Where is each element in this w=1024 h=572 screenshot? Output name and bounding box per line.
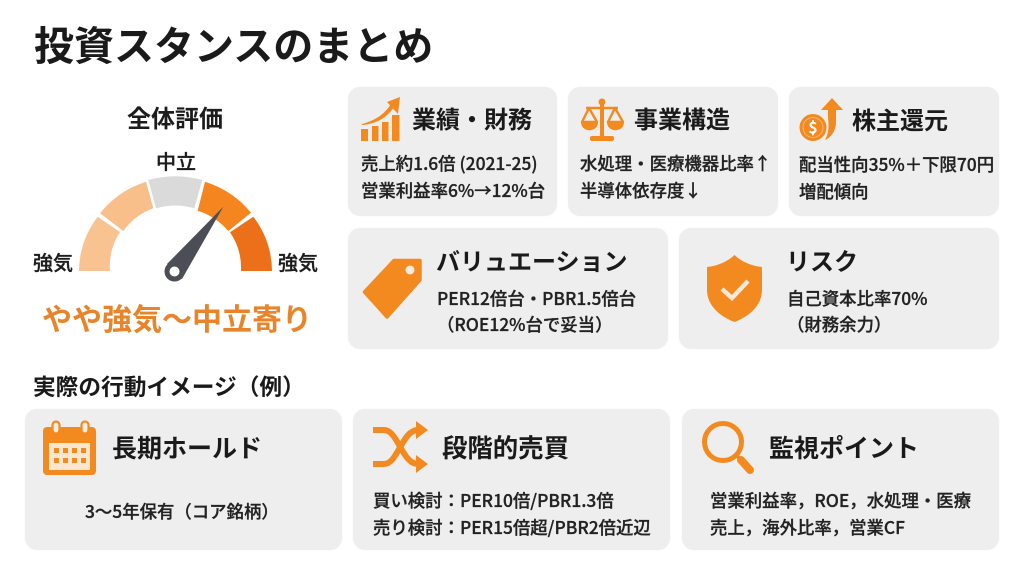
panel: risk — [679, 228, 999, 349]
text: margin: 営業利益率6%→12%台 — [361, 178, 545, 203]
text: sell criteria: 売り検討：PER15倍超/PBR2倍近辺 — [373, 515, 651, 540]
gauge chart — [79, 176, 272, 282]
heading: 監視ポイント — [769, 429, 919, 465]
icon: coin with arrow: $ — [808, 114, 818, 138]
text: ROE note: （ROE12%台で妥当） — [437, 312, 612, 337]
panel: earnings and finance — [348, 87, 557, 216]
title: 投資スタンスのまとめ — [34, 14, 433, 72]
text: holding period: 3〜5年保有（コア銘柄） — [85, 499, 279, 524]
heading: 株主還元 — [852, 101, 948, 136]
label: neutral: 中立 — [156, 146, 196, 175]
icon: calendar — [43, 420, 96, 475]
text: buy criteria: 買い検討：PER10倍/PBR1.3倍 — [373, 488, 614, 513]
heading: overall rating: 全体評価 — [127, 99, 223, 134]
panel: shareholder returns — [789, 87, 999, 216]
text: metrics line 1: 営業利益率，ROE，水処理・医療 — [710, 488, 971, 513]
icon: coin with arrow — [800, 98, 843, 141]
label: right bullish: 強気 — [278, 247, 318, 276]
panel: overall rating gauge — [33, 99, 318, 339]
heading: リスク — [786, 242, 858, 277]
icon: magnifying glass — [702, 421, 754, 474]
text: multiples: PER12倍台・PBR1.5倍台 — [437, 286, 636, 311]
heading: 事業構造 — [634, 100, 730, 135]
heading: バリュエーション — [436, 242, 628, 277]
icon: shield with check — [707, 255, 762, 322]
text: semiconductor: 半導体依存度↓ — [580, 178, 702, 203]
icon: rising bar chart — [361, 97, 400, 141]
section heading: action image: 実際の行動イメージ（例） — [33, 369, 305, 402]
heading: 業績・財務 — [412, 100, 532, 135]
text: sales: 売上約1.6倍 (2021-25) — [361, 151, 538, 176]
verdict text: やや強気〜中立寄り — [42, 295, 312, 339]
panel: valuation — [348, 228, 668, 349]
panel: long-term hold — [25, 409, 342, 550]
icon: shuffle arrows — [373, 421, 428, 473]
heading: 段階的売買 — [442, 429, 569, 465]
label: left bullish: 強気 — [33, 247, 73, 276]
icon: scales — [580, 98, 624, 141]
text: water and medical: 水処理・医療機器比率↑ — [580, 151, 771, 176]
icon: price tag — [362, 258, 422, 319]
panel: staged trading — [353, 409, 670, 550]
text: metrics line 2: 売上，海外比率，営業CF — [710, 515, 905, 540]
heading: 長期ホールド — [112, 429, 262, 465]
text: financial headroom: （財務余力） — [787, 312, 891, 337]
panel: business structure — [568, 87, 778, 216]
panel: monitoring points — [682, 409, 999, 550]
text: payout: 配当性向35%＋下限70円 — [799, 152, 994, 177]
text: dividend trend: 増配傾向 — [799, 179, 869, 204]
text: equity ratio: 自己資本比率70% — [787, 286, 928, 311]
